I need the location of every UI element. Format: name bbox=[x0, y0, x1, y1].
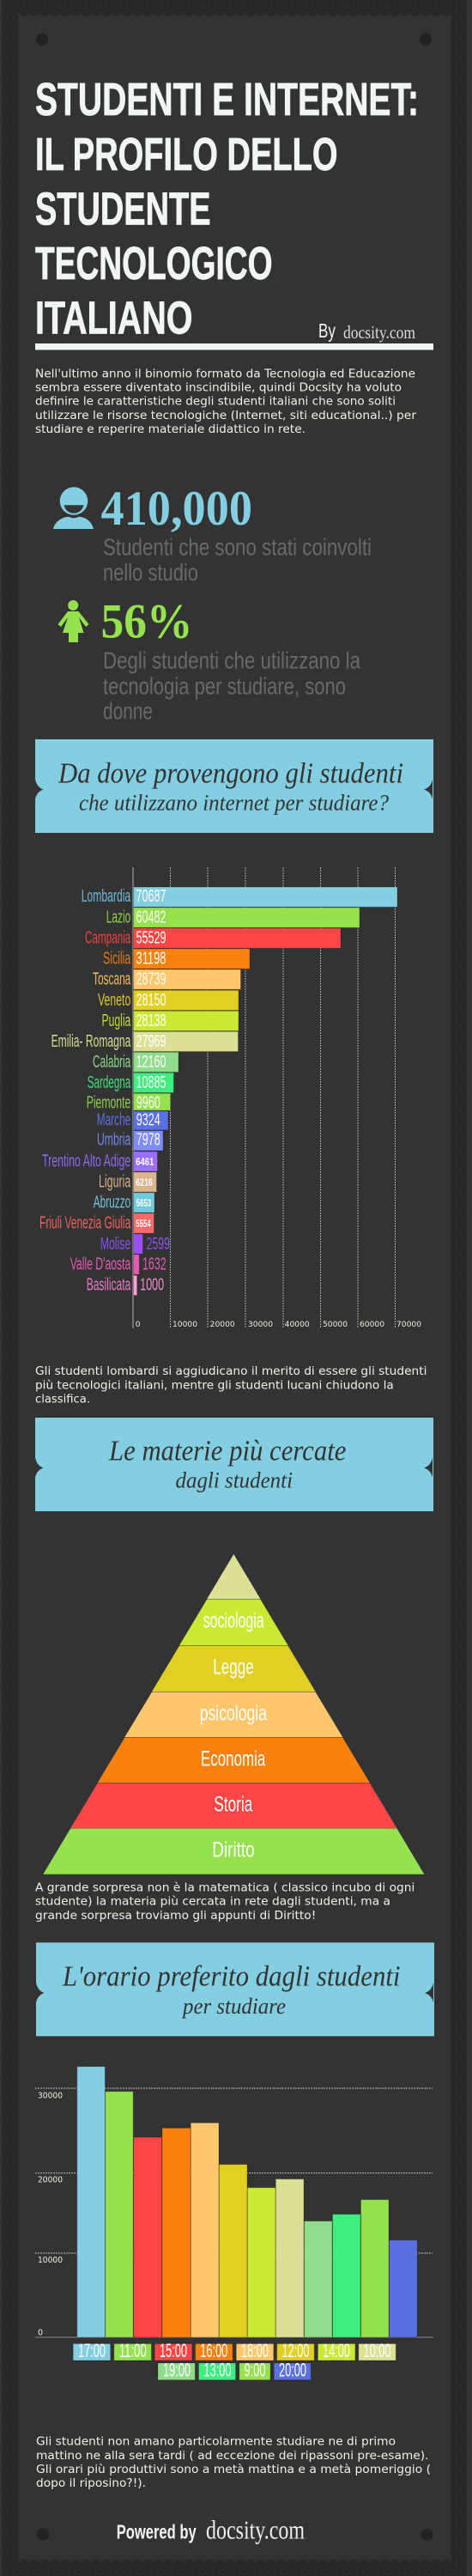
stat caption: women: Degli studenti che utilizzano la bbox=[103, 647, 360, 674]
footer: powered by: docsity.com bbox=[206, 2515, 305, 2545]
region labels: Puglia bbox=[101, 1012, 131, 1030]
legend: hours: 15:00 bbox=[160, 2340, 187, 2361]
text: hours comment: Gli studenti non amano particolarmente studiare ne di primo bbox=[36, 2436, 396, 2449]
bar chart: regions bbox=[39, 867, 421, 1329]
region labels: Basilicata bbox=[87, 1276, 131, 1295]
y axis labels: 20000 bbox=[38, 2176, 63, 2185]
stat caption: women: tecnologia per studiare, sono bbox=[103, 672, 346, 699]
values: 2599 bbox=[147, 1235, 170, 1254]
region labels: Umbria bbox=[97, 1130, 131, 1149]
pyramid layer: Economia: Economia bbox=[201, 1747, 265, 1771]
y axis labels bbox=[38, 2091, 63, 2337]
values: 28739 bbox=[136, 970, 166, 989]
stat caption: students bbox=[103, 534, 372, 586]
values: 1000 bbox=[140, 1276, 164, 1295]
column chart: hours bbox=[35, 2067, 433, 2337]
region labels: Trentino Alto Adige bbox=[42, 1151, 130, 1170]
pyramid layer: Storia bbox=[70, 1783, 396, 1828]
values: 28138 bbox=[136, 1012, 166, 1030]
intro text: sembra essere diventato inscindibile, quindi Docsity ha voluto bbox=[35, 381, 402, 395]
pyramid layer: top bbox=[207, 1554, 261, 1599]
stat caption: women bbox=[103, 647, 360, 725]
x axis labels: 60000 bbox=[360, 1321, 384, 1329]
text: hours comment bbox=[36, 2436, 431, 2490]
text: regions comment bbox=[35, 1365, 427, 1406]
values: 27969 bbox=[136, 1032, 166, 1051]
title bbox=[35, 74, 419, 343]
x axis labels: 20000 bbox=[210, 1321, 235, 1329]
pyramid layer: Diritto: Diritto bbox=[212, 1838, 255, 1862]
legend: hours: 11:00 bbox=[119, 2340, 147, 2361]
region labels: Friuli Venezia Giulia bbox=[39, 1214, 131, 1233]
values: 6461 bbox=[136, 1156, 154, 1168]
values: 28150 bbox=[136, 991, 166, 1010]
pyramid layer: psicologia: psicologia bbox=[200, 1701, 267, 1725]
text: materie comment: grande sorpresa troviamo gli appunti di Diritto! bbox=[35, 1910, 316, 1923]
pyramid chart bbox=[43, 1554, 424, 1874]
region labels: Abruzzo bbox=[94, 1194, 130, 1212]
values: 5554 bbox=[136, 1218, 151, 1230]
y axis labels: 10000 bbox=[38, 2256, 63, 2265]
region labels: Campania bbox=[85, 929, 131, 948]
values: 6216 bbox=[136, 1176, 153, 1188]
stat: 56%: 56% bbox=[101, 595, 192, 649]
legend: hours: 16:00 bbox=[200, 2340, 227, 2361]
title: ITALIANO bbox=[35, 292, 192, 343]
footer: powered by bbox=[117, 2515, 305, 2545]
pyramid layer: Diritto bbox=[43, 1829, 424, 1874]
banner: orario: per studiare bbox=[181, 1994, 286, 2019]
banner: materie: dagli studenti bbox=[175, 1468, 293, 1493]
values: 1632 bbox=[142, 1255, 166, 1273]
legend: hours: 12:00 bbox=[281, 2340, 309, 2361]
x axis labels: 40000 bbox=[285, 1321, 310, 1329]
x axis labels bbox=[136, 1321, 421, 1329]
byline logo: docsity.com bbox=[343, 322, 415, 343]
legend: hours: 9:00 bbox=[244, 2359, 266, 2380]
values: 31198 bbox=[136, 950, 166, 969]
region labels: Lombardia bbox=[82, 887, 131, 906]
pyramid layer: Economia bbox=[98, 1738, 370, 1783]
region labels: Marche bbox=[97, 1111, 130, 1130]
x axis labels: 50000 bbox=[323, 1321, 348, 1329]
y axis labels: 0 bbox=[38, 2328, 43, 2337]
region labels: Piemonte bbox=[87, 1094, 130, 1113]
title: IL PROFILO DELLO bbox=[35, 129, 338, 180]
pyramid layer: sociologia: sociologia bbox=[203, 1609, 264, 1633]
footer: powered by: Powered by bbox=[117, 2521, 197, 2543]
x axis labels: 30000 bbox=[248, 1321, 273, 1329]
region labels bbox=[39, 887, 131, 1295]
text: materie comment: A grande sorpresa non è la matematica ( classico incubo di ogni bbox=[35, 1882, 415, 1895]
text: hours comment: dopo il riposino?!). bbox=[36, 2477, 146, 2490]
bars and values bbox=[134, 887, 397, 1296]
region labels: Calabria bbox=[93, 1053, 131, 1072]
intro text bbox=[35, 368, 417, 436]
legend: hours: 10:00 bbox=[364, 2340, 391, 2361]
legend: hours bbox=[73, 2340, 396, 2380]
pin dots top bbox=[36, 33, 432, 46]
values: 7978 bbox=[136, 1130, 160, 1149]
x axis labels: 0 bbox=[136, 1321, 141, 1329]
title: STUDENTE bbox=[35, 184, 211, 235]
region labels: Valle D'aosta bbox=[70, 1255, 131, 1273]
intro text: studiare e reperire materiale didattico in rete. bbox=[35, 423, 306, 436]
banner: provenienza: Da dove provengono gli studenti bbox=[57, 758, 403, 790]
pyramid layer: Storia: Storia bbox=[214, 1792, 252, 1816]
x axis labels: 10000 bbox=[172, 1321, 197, 1329]
text: hours comment: Gli orari più produttivi sono a metà mattina e a metà pomeriggio ( bbox=[36, 2464, 431, 2476]
byline logo: By bbox=[318, 319, 336, 342]
banner: materie: Le materie più cercate bbox=[108, 1436, 346, 1467]
text: regions comment: classifica. bbox=[35, 1393, 90, 1406]
region labels: Liguria bbox=[99, 1172, 131, 1191]
pin dots bottom bbox=[37, 2528, 433, 2541]
banner: provenienza bbox=[35, 739, 433, 833]
banner: provenienza: che utilizzano internet per studiare? bbox=[79, 790, 389, 815]
region labels: Toscana bbox=[93, 970, 131, 989]
byline logo bbox=[318, 319, 415, 343]
text: regions comment: Gli studenti lombardi si aggiudicano il merito di essere gli studenti bbox=[35, 1365, 427, 1378]
intro text: utilizzare le risorse tecnologiche (Internet, siti educational..) per bbox=[35, 410, 417, 422]
x axis labels: 70000 bbox=[396, 1321, 421, 1329]
y axis labels: 30000 bbox=[38, 2091, 63, 2100]
values: 12160 bbox=[136, 1053, 166, 1072]
intro text: definire le caratteristiche degli studenti italiani che sono soliti bbox=[35, 396, 396, 409]
stat caption: students: Studenti che sono stati coinvolti bbox=[103, 534, 372, 561]
values: 9960 bbox=[136, 1094, 160, 1113]
stat: 410,000: 410,000 bbox=[101, 482, 252, 536]
legend: hours: 17:00 bbox=[78, 2340, 106, 2361]
legend: hours: 18:00 bbox=[241, 2340, 269, 2361]
legend: hours: 14:00 bbox=[323, 2340, 350, 2361]
legend: hours: 20:00 bbox=[279, 2359, 306, 2380]
region labels: Sicilia bbox=[103, 950, 131, 969]
icon: student bbox=[53, 487, 94, 529]
region labels: Veneto bbox=[98, 991, 130, 1010]
title rule bbox=[35, 343, 433, 350]
region labels: Molise bbox=[100, 1235, 130, 1254]
region labels: Lazio bbox=[106, 908, 130, 927]
columns bbox=[77, 2067, 417, 2337]
region labels: Sardegna bbox=[88, 1073, 131, 1092]
intro text: Nell'ultimo anno il binomio formato da Tecnologia ed Educazione bbox=[35, 368, 415, 380]
values: 10885 bbox=[136, 1073, 166, 1092]
values: 55529 bbox=[136, 929, 166, 948]
banner: orario: L'orario preferito dagli studenti bbox=[62, 1960, 401, 1992]
pyramid layer: sociologia bbox=[179, 1600, 288, 1645]
banner: orario bbox=[36, 1942, 434, 2036]
icon: woman bbox=[58, 600, 89, 642]
text: regions comment: più tecnologici italiani, mentre gli studenti lucani chiudono la bbox=[35, 1379, 394, 1392]
legend: hours: 19:00 bbox=[163, 2359, 191, 2380]
region labels: Emilia- Romagna bbox=[51, 1032, 131, 1051]
title: TECNOLOGICO bbox=[35, 238, 273, 289]
banner: materie bbox=[35, 1418, 433, 1511]
pyramid layer: Legge: Legge bbox=[213, 1655, 254, 1679]
text: materie comment bbox=[35, 1882, 415, 1923]
pyramid layer: Legge bbox=[152, 1646, 316, 1692]
values: 5653 bbox=[136, 1197, 151, 1209]
stat caption: women: donne bbox=[103, 698, 153, 725]
text: hours comment: mattino ne alla sera tardi ( ad eccezione dei ripassoni pre-esame). bbox=[36, 2450, 429, 2463]
values: 70687 bbox=[136, 887, 166, 906]
values bbox=[136, 887, 170, 1295]
values: 60482 bbox=[136, 908, 166, 927]
legend: hours: 13:00 bbox=[204, 2359, 232, 2380]
pyramid layer: psicologia bbox=[124, 1692, 342, 1737]
stat caption: students: nello studio bbox=[103, 559, 198, 586]
text: materie comment: studente) la materia più cercata in rete dagli studenti, ma a bbox=[35, 1896, 390, 1909]
values: 9324 bbox=[136, 1111, 160, 1130]
